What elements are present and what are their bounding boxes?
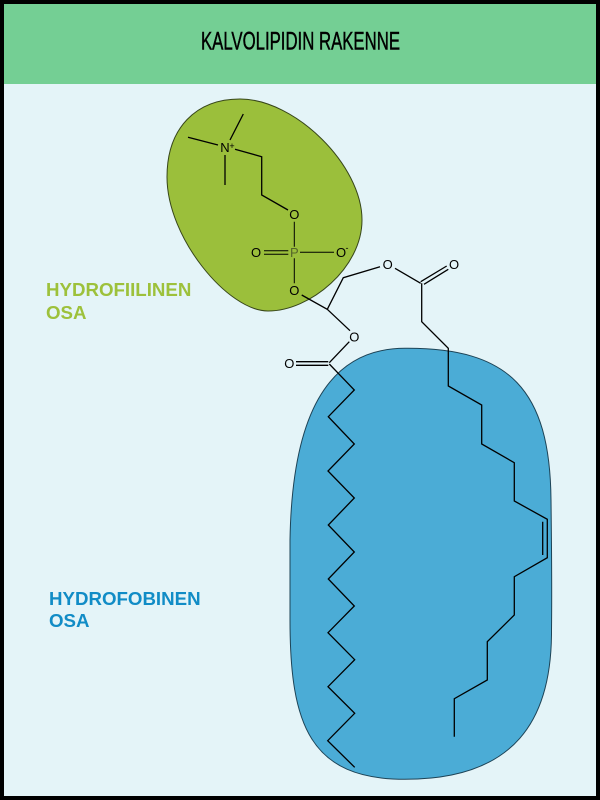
phospholipid molecule structure <box>188 114 547 767</box>
atom labels: P <box>290 245 299 260</box>
ester carbonyl bonds <box>296 266 448 365</box>
label: hydrophobic part: OSA <box>49 610 90 631</box>
saturated fatty acid tail <box>328 364 355 767</box>
atom labels: N <box>220 140 230 155</box>
hydrophilic region blob <box>167 99 362 311</box>
glycerol backbone bonds <box>302 267 421 363</box>
atom labels: O <box>383 257 393 272</box>
atom labels <box>220 140 459 371</box>
choline head group bonds <box>188 114 288 210</box>
atom labels: + <box>229 141 235 151</box>
label: hydrophilic part: OSA <box>46 302 86 323</box>
phosphate bonds <box>264 222 334 283</box>
atom labels: - <box>346 243 348 253</box>
atom labels: O <box>289 283 299 298</box>
unsaturated fatty acid tail <box>422 283 547 737</box>
atom labels: O <box>349 330 359 344</box>
atom labels: O <box>449 257 459 272</box>
atom labels: O <box>289 207 299 222</box>
label: hydrophilic part: HYDROFIILINEN <box>46 279 191 300</box>
hydrophobic region blob <box>290 348 552 779</box>
atom labels: O <box>336 245 346 260</box>
atom labels: O <box>284 356 294 371</box>
atom labels: O <box>251 245 261 260</box>
label: hydrophobic part: HYDROFOBINEN <box>49 588 201 609</box>
title: KALVOLIPIDIN RAKENNE <box>201 28 400 56</box>
header band <box>4 4 596 84</box>
